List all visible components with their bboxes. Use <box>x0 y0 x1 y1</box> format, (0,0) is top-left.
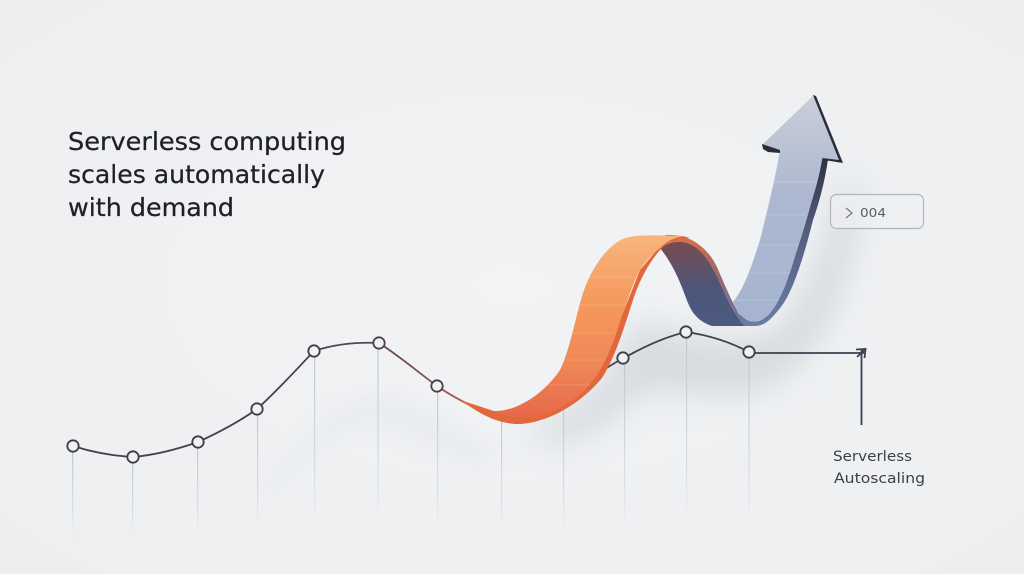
soft shadows <box>270 170 860 495</box>
arrow connector <box>755 349 866 425</box>
arrowhead dark edge <box>762 95 843 163</box>
label: Serverless Autoscaling: Serverless <box>833 449 912 465</box>
ribbon: fold edge <box>660 235 757 326</box>
arrow face <box>733 95 842 322</box>
label: Serverless Autoscaling: Autoscaling <box>834 471 925 487</box>
title line 2: scales automatically <box>68 160 325 189</box>
title: Serverless computing <box>68 127 346 156</box>
ribbon: orange lower edge <box>460 236 690 424</box>
line chart curve <box>73 332 749 457</box>
ribbon: dark inner face <box>660 242 747 326</box>
vertical drop lines <box>72 338 750 538</box>
label: Serverless Autoscaling <box>833 449 925 487</box>
ribbon: orange face <box>460 235 683 417</box>
badge <box>830 194 924 228</box>
chart markers <box>67 326 755 463</box>
title line 3: with demand <box>68 193 234 222</box>
badge: 004 <box>860 205 886 220</box>
blue arrow <box>730 95 843 326</box>
arrow shaft edge <box>739 159 828 326</box>
